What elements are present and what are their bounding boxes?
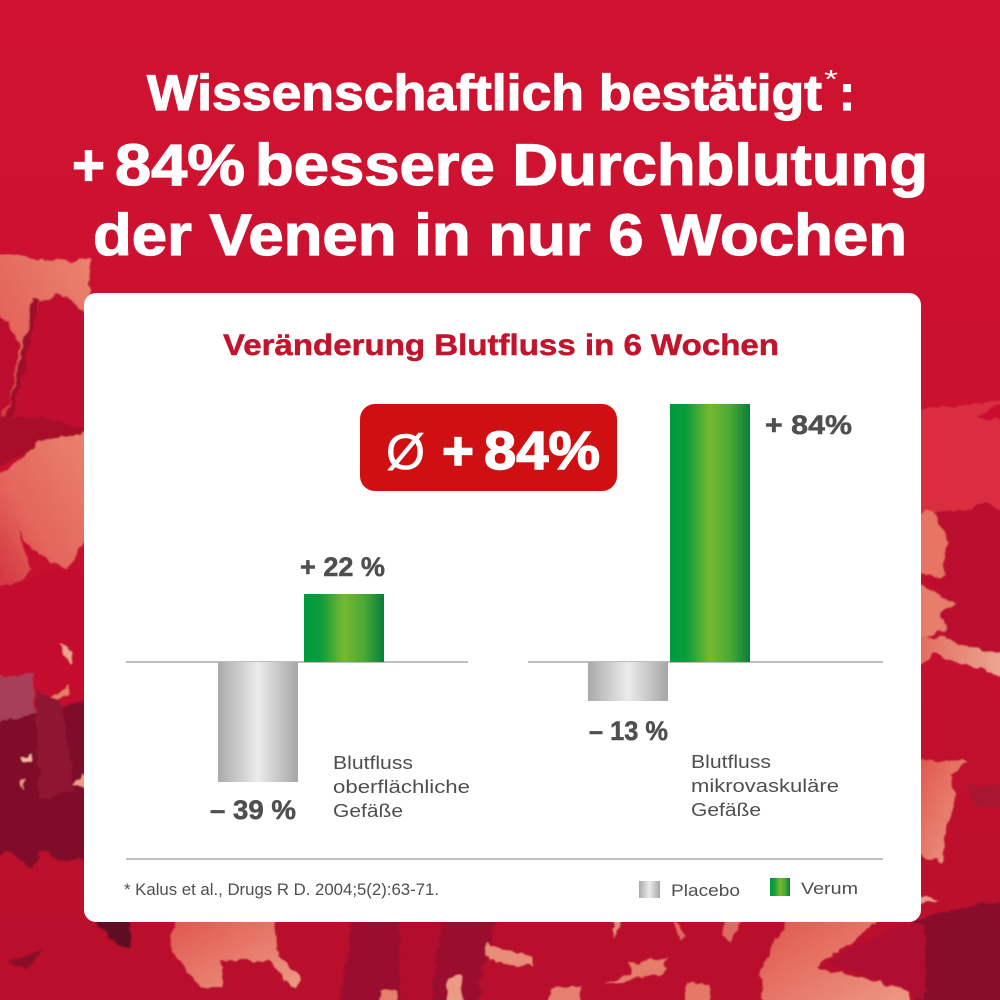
left side <box>0 254 90 440</box>
title: der Venen in nur 6 Wochen <box>93 203 907 268</box>
bar chart: superficial vessels: Gefäße <box>333 801 403 821</box>
bottom <box>96 920 130 950</box>
legend <box>639 878 858 900</box>
badge: average +84% <box>360 404 617 491</box>
title: 84% <box>115 133 245 198</box>
badge: average +84%: + <box>442 421 474 481</box>
title: * <box>824 64 838 94</box>
right side <box>915 400 1000 520</box>
legend: Placebo <box>671 882 740 900</box>
bar chart: microvascular vessels: – 13 % <box>589 716 668 746</box>
bar chart: microvascular vessels <box>528 404 883 820</box>
bar chart: superficial vessels: Blutfluss <box>333 753 413 773</box>
bar chart: microvascular vessels: + 84% <box>765 410 852 440</box>
title: Wissenschaftlich bestätigt <box>147 65 822 121</box>
bar chart: microvascular vessels: Gefäße <box>691 800 761 820</box>
title <box>72 64 928 268</box>
panel: chart card <box>84 293 921 922</box>
footnote: * Kalus et al., Drugs R D. 2004;5(2):63-71. <box>124 881 439 899</box>
bar chart: superficial vessels: – 39 % <box>210 795 296 825</box>
bar chart: superficial vessels: + 22 % <box>300 552 385 582</box>
bar chart: superficial vessels: oberflächliche <box>333 777 470 797</box>
bar chart: microvascular vessels: mikrovaskuläre <box>691 776 839 796</box>
chart heading: Veränderung Blutfluss in 6 Wochen <box>223 329 779 362</box>
badge: average +84%: 84% <box>484 421 600 481</box>
bar chart: microvascular vessels: Blutfluss <box>691 752 771 772</box>
legend: Verum <box>801 880 858 898</box>
title: bessere Durchblutung <box>255 133 928 198</box>
bar chart: superficial vessels <box>126 552 470 825</box>
title: : <box>839 65 855 121</box>
badge: average +84%: Ø <box>386 424 425 480</box>
title: + <box>72 133 105 198</box>
